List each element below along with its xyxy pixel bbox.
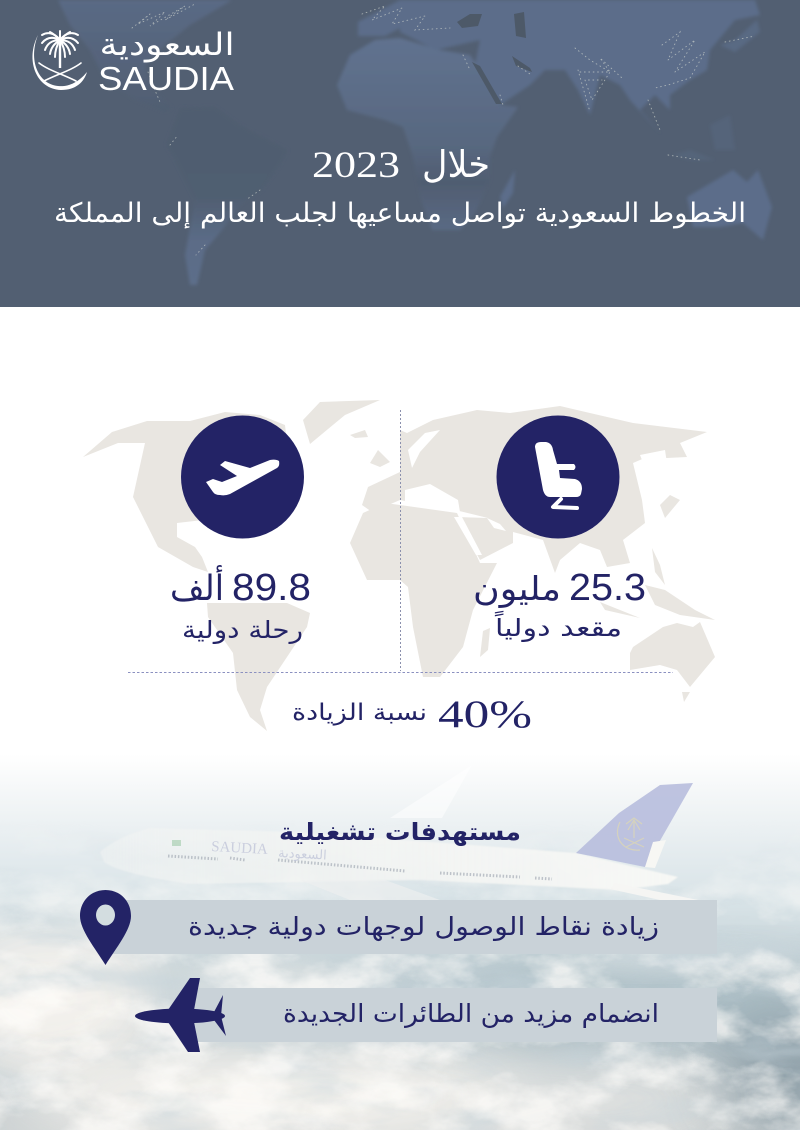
target text: انضمام مزيد من الطائرات الجديدة: [283, 999, 659, 1028]
target: new aircraft: [135, 978, 717, 1052]
target bar: [190, 988, 717, 1042]
value: 89.8 thousand: 89.8: [232, 567, 311, 609]
stat: increase rate: 40%: [438, 693, 532, 736]
heading: during 2023: خلال: [422, 143, 490, 186]
Saudia logo: [33, 27, 235, 97]
label: international seat: مقعد دولياً: [494, 611, 622, 642]
value: 25.3 million: [473, 567, 646, 609]
target bar: [105, 900, 717, 954]
icon: airplane take-off: [181, 416, 304, 538]
subtitle: الخطوط السعودية تواصل مساعيها لجلب العالم إلى المملكة: [54, 198, 746, 229]
value: 89.8 thousand: [170, 565, 311, 609]
airplane photo: [100, 765, 698, 900]
panel: header banner: [0, 0, 800, 307]
stat: increase rate: نسبة الزيادة: [292, 700, 427, 726]
stat: international flights: [170, 416, 311, 644]
tail palm emblem: [617, 818, 644, 850]
aircraft windows: [168, 856, 552, 879]
heading: during 2023: 2023: [312, 145, 400, 186]
icon: airplane seat: [496, 416, 620, 538]
heading: during 2023: [312, 143, 490, 186]
logo Arabic wordmark: السعودية: [100, 27, 234, 63]
aircraft SAUDIA livery: السعودية: [278, 846, 327, 864]
logo SAUDIA wordmark: SAUDIA: [98, 60, 234, 97]
icon: location pin: [80, 890, 131, 965]
aircraft SAUDIA livery: SAUDIA: [211, 839, 268, 858]
panel: sky and clouds background: [0, 784, 800, 1130]
value: 25.3 million: مليون: [473, 569, 561, 608]
target text: زيادة نقاط الوصول لوجهات دولية جديدة: [188, 912, 659, 942]
aircraft fuselage: [100, 828, 678, 890]
heading: operational targets: مستهدفات تشغيلية: [279, 818, 521, 846]
value: 89.8 thousand: ألف: [170, 565, 224, 609]
stat: international seats: [473, 416, 646, 642]
dashed divider: vertical: [400, 410, 402, 671]
value: 25.3 million: 25.3: [569, 567, 646, 609]
Mediterranean and sea gaps: [405, 430, 668, 555]
logo emblem: [33, 31, 87, 90]
aircraft tail fin: [576, 783, 693, 867]
aircraft SAUDIA livery: [211, 839, 327, 864]
target: new destinations: [80, 890, 717, 965]
header night world map: [58, 0, 772, 285]
label: international flight: رحلة دولية: [182, 616, 303, 644]
dashed divider: horizontal: [128, 672, 673, 674]
icon: aircraft top view: [135, 978, 226, 1052]
stat: increase rate: [292, 693, 532, 736]
background world map: [83, 400, 715, 731]
